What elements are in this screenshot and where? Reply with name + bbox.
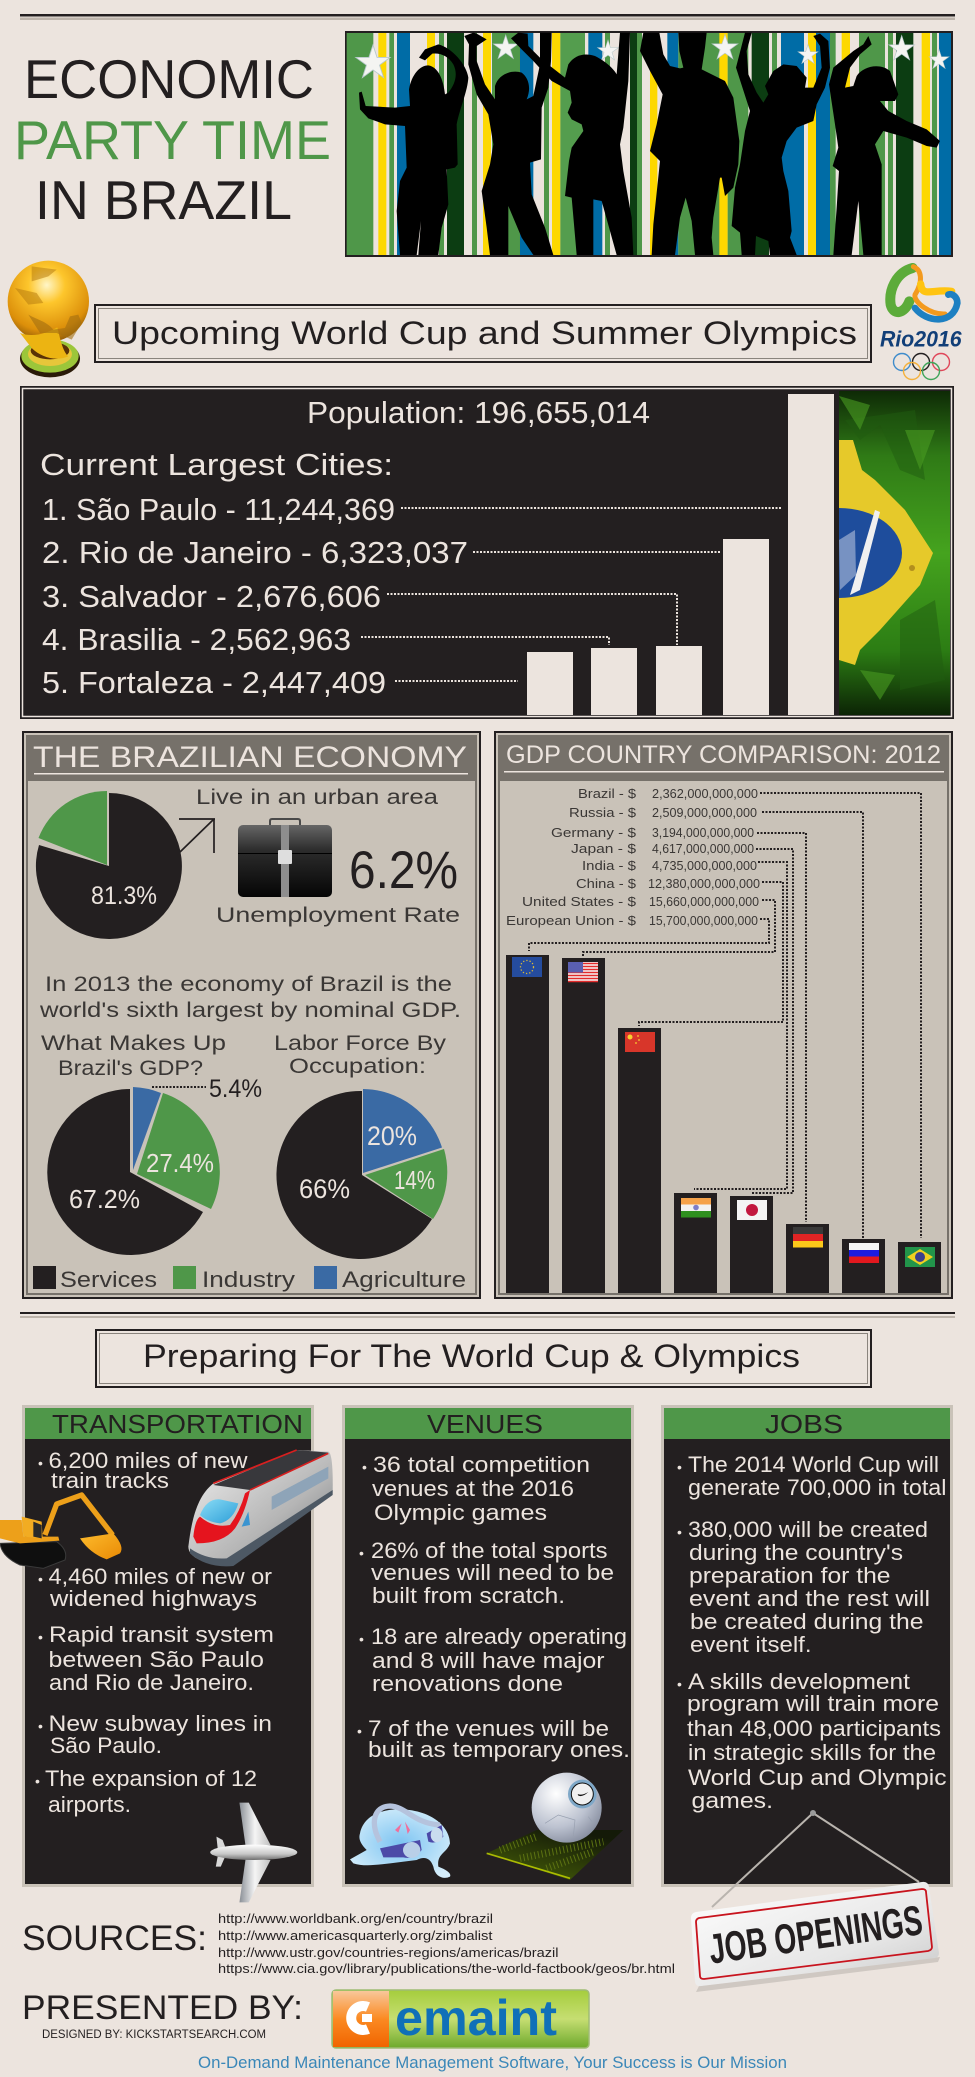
arrow	[179, 819, 215, 853]
bar chart: GDP by country	[506, 955, 941, 1293]
sources: SOURCES:	[22, 1919, 207, 1958]
legend	[33, 1266, 466, 1292]
flag: China	[625, 1032, 655, 1052]
bullet list: 18 are already operating	[371, 1624, 627, 1649]
flag image: painted Brazilian flag	[776, 391, 950, 715]
legend: Agriculture	[342, 1267, 466, 1292]
text: sixth largest economy: world's sixth largest by nominal GDP.	[39, 999, 461, 1022]
bullet list: built from scratch.	[372, 1583, 565, 1608]
cities list: 3. Salvador - 2,676,606	[42, 579, 381, 614]
icon: airplane	[210, 1803, 297, 1902]
bar chart: city population	[527, 394, 834, 715]
pie chart: labor force: 14%	[394, 1165, 435, 1195]
pie chart: GDP makeup: 5.4%	[209, 1075, 262, 1103]
GDP value list: China - $	[576, 876, 637, 891]
GDP value list: Germany - $	[551, 825, 637, 840]
bullet list: between São Paulo	[48, 1647, 264, 1672]
source links: http://www.americasquarterly.org/zimbalist	[218, 1928, 493, 1943]
chart heading: GDP makeup: What Makes Up	[41, 1032, 226, 1055]
chart heading: GDP makeup	[41, 1032, 226, 1080]
bullet list: Rapid transit system	[49, 1622, 274, 1647]
icon: soccer ball on grass	[487, 1773, 623, 1880]
bullet list: preparation for the	[689, 1563, 890, 1588]
bullet list: airports.	[48, 1792, 131, 1817]
bullet list: 26% of the total sports	[371, 1538, 608, 1563]
hero image: dancing silhouettes on Brazilian stripes	[345, 31, 953, 257]
bullet list: The expansion of 12	[45, 1766, 257, 1791]
bullet list: in strategic skills for the	[688, 1740, 936, 1765]
bullet list: and Rio de Janeiro.	[49, 1670, 254, 1695]
bullet list	[35, 1448, 274, 1817]
bullet list: •	[362, 1459, 367, 1475]
bullet list: renovations done	[372, 1671, 563, 1696]
bullet list: and 8 will have major	[372, 1648, 604, 1673]
bullet list: venues at the 2016	[372, 1476, 574, 1501]
tagline: On-Demand Maintenance Management Software, Your Success is Our Mission	[198, 2053, 787, 2072]
GDP value list: 4,617,000,000,000	[652, 841, 754, 856]
bullet list: 6,200 miles of new	[48, 1448, 248, 1473]
GDP value list: European Union - $	[506, 913, 637, 928]
bullet list	[677, 1452, 946, 1813]
legend: Industry	[202, 1267, 295, 1292]
bullet list: 380,000 will be created	[688, 1517, 928, 1542]
bullet list: program will train more	[687, 1691, 939, 1716]
GDP value list: 2,362,000,000,000	[652, 786, 758, 801]
icon: swim goggles	[350, 1806, 450, 1878]
flag: European Union	[512, 957, 542, 977]
bullet list: event and the rest will	[689, 1586, 930, 1611]
bullet list: generate 700,000 in total	[688, 1475, 946, 1500]
panel: transportation	[22, 1405, 314, 1887]
bullet list: than 48,000 participants	[687, 1716, 941, 1741]
cities list: Current Largest Cities:	[40, 447, 393, 482]
heading banner: upcoming events: Upcoming World Cup and Summer Olympics	[112, 315, 857, 351]
pie chart: labor force	[276, 1089, 447, 1259]
GDP value list: Brazil - $	[578, 786, 637, 801]
heading: GDP COUNTRY COMPARISON: 2012	[506, 741, 941, 769]
panel: venues	[342, 1405, 634, 1887]
flag: United States	[568, 962, 598, 982]
bullet list: games.	[692, 1788, 773, 1813]
logo: emaint: emaint	[395, 1990, 557, 2046]
bullet list: venues will need to be	[371, 1560, 614, 1585]
title: IN BRAZIL	[35, 169, 292, 231]
icon: golden World Cup trophy	[8, 261, 89, 377]
heading: VENUES	[427, 1409, 543, 1439]
pie chart: urban population	[36, 791, 182, 939]
bullet list: built as temporary ones.	[368, 1737, 630, 1762]
GDP value list: United States - $	[522, 894, 637, 909]
bullet list: •	[677, 1524, 682, 1540]
bullet list: •	[357, 1723, 362, 1739]
bullet list: event itself.	[690, 1632, 812, 1657]
flag: Germany	[793, 1227, 823, 1248]
bullet list: •	[35, 1773, 40, 1789]
heading: THE BRAZILIAN ECONOMY	[33, 741, 467, 774]
bullet list: •	[38, 1571, 43, 1587]
bullet list: The 2014 World Cup will	[688, 1452, 939, 1477]
icon: Rio 2016 Olympic logo: Rio2016	[880, 326, 962, 351]
sign: job openings	[691, 1810, 940, 1992]
heading: JOBS	[765, 1409, 843, 1439]
heading: TRANSPORTATION	[52, 1409, 303, 1439]
unemployment stat: 6.2%	[349, 841, 458, 900]
unemployment stat: Unemployment Rate	[216, 904, 460, 927]
pie chart: urban population: 81.3%	[91, 882, 157, 910]
source links: http://www.ustr.gov/countries-regions/americas/brazil	[218, 1945, 559, 1960]
GDP value list: 4,735,000,000,000	[652, 858, 757, 873]
cities list	[40, 447, 468, 700]
bullet list: New subway lines in	[48, 1711, 272, 1736]
bullet list: •	[38, 1455, 43, 1471]
pie chart: GDP makeup: 27.4%	[146, 1148, 214, 1178]
population heading: Population: 196,655,014	[307, 395, 650, 430]
source links: https://www.cia.gov/library/publications/the-world-factbook/geos/br.html	[218, 1961, 675, 1976]
pie chart: labor force: 66%	[299, 1174, 350, 1204]
bullet list: 36 total competition	[373, 1452, 590, 1477]
bullet list: •	[677, 1459, 682, 1475]
GDP value list: 2,509,000,000,000	[652, 805, 757, 820]
bullet list: during the country's	[689, 1540, 903, 1565]
GDP value list: Japan - $	[571, 841, 637, 856]
text: sixth largest economy: In 2013 the economy of Brazil is the	[45, 973, 452, 996]
pie chart: GDP makeup: 67.2%	[69, 1184, 140, 1214]
presented by: PRESENTED BY:	[22, 1989, 303, 2027]
cities list: 4. Brasilia - 2,562,963	[42, 622, 351, 657]
pie chart: GDP makeup	[47, 1075, 262, 1255]
bullet list: A skills development	[688, 1669, 910, 1694]
panel: jobs	[661, 1405, 953, 1887]
heading banner: preparing: Preparing For The World Cup & Olympics	[143, 1338, 800, 1374]
flag: Russia	[849, 1243, 879, 1263]
GDP value list: India - $	[582, 858, 637, 873]
bullet list: •	[677, 1676, 682, 1692]
urban label: Live in an urban area	[196, 786, 438, 809]
icon: bullet train	[188, 1450, 333, 1566]
bullet list: •	[38, 1629, 43, 1645]
bullet list: train tracks	[51, 1468, 169, 1493]
heading banner: preparing	[96, 1330, 871, 1387]
bullet list: World Cup and Olympic	[688, 1765, 946, 1790]
bullet list: be created during the	[690, 1609, 924, 1634]
chart heading: GDP makeup: Brazil's GDP?	[58, 1057, 203, 1080]
cities list: 5. Fortaleza - 2,447,409	[42, 665, 386, 700]
title: PARTY TIME	[14, 109, 331, 171]
cities list: 2. Rio de Janeiro - 6,323,037	[42, 535, 468, 570]
bullet list: widened highways	[49, 1586, 257, 1611]
bullet list: •	[359, 1545, 364, 1561]
chart heading: labor force: Occupation:	[289, 1055, 426, 1078]
panel: population and largest cities	[20, 386, 954, 719]
cities list: 1. São Paulo - 11,244,369	[42, 492, 395, 527]
bullet list	[357, 1452, 630, 1762]
source links	[218, 1911, 675, 1976]
source links: http://www.worldbank.org/en/country/brazil	[218, 1911, 493, 1926]
chart heading: labor force: Labor Force By	[274, 1032, 447, 1055]
icon: excavator	[0, 1495, 121, 1568]
chart heading: labor force	[274, 1032, 447, 1078]
bullet list: Olympic games	[374, 1500, 547, 1525]
flag: Brazil	[905, 1247, 935, 1267]
GDP value list	[506, 786, 760, 928]
flag: Japan	[737, 1200, 767, 1220]
logo: emaint	[332, 1990, 589, 2048]
legend: Services	[60, 1267, 157, 1292]
GDP value list: 3,194,000,000,000	[652, 825, 754, 840]
heading banner: upcoming events	[95, 305, 871, 362]
text: sixth largest economy	[39, 973, 461, 1022]
GDP value list: 15,660,000,000,000	[649, 894, 759, 909]
icon: Rio 2016 Olympic logo	[880, 267, 962, 380]
panel: GDP country comparison	[494, 731, 953, 1299]
sources	[22, 1911, 675, 1976]
pie chart: labor force: 20%	[367, 1121, 417, 1151]
GDP value list: Russia - $	[569, 805, 637, 820]
bullet list: 7 of the venues will be	[368, 1716, 609, 1741]
bullet list: •	[359, 1631, 364, 1647]
title: ECONOMIC	[24, 48, 314, 110]
panel: the Brazilian economy	[22, 731, 481, 1299]
bullet list: 4,460 miles of new or	[48, 1564, 272, 1589]
presented by: DESIGNED BY: KICKSTARTSEARCH.COM	[42, 2029, 266, 2041]
bullet list: São Paulo.	[50, 1733, 162, 1758]
GDP value list: 12,380,000,000,000	[648, 876, 760, 891]
bullet list: •	[38, 1718, 43, 1734]
flag: India	[681, 1198, 711, 1218]
GDP value list: 15,700,000,000,000	[649, 913, 758, 928]
unemployment stat	[216, 841, 460, 927]
icon: briefcase	[238, 819, 332, 897]
title	[14, 48, 331, 231]
